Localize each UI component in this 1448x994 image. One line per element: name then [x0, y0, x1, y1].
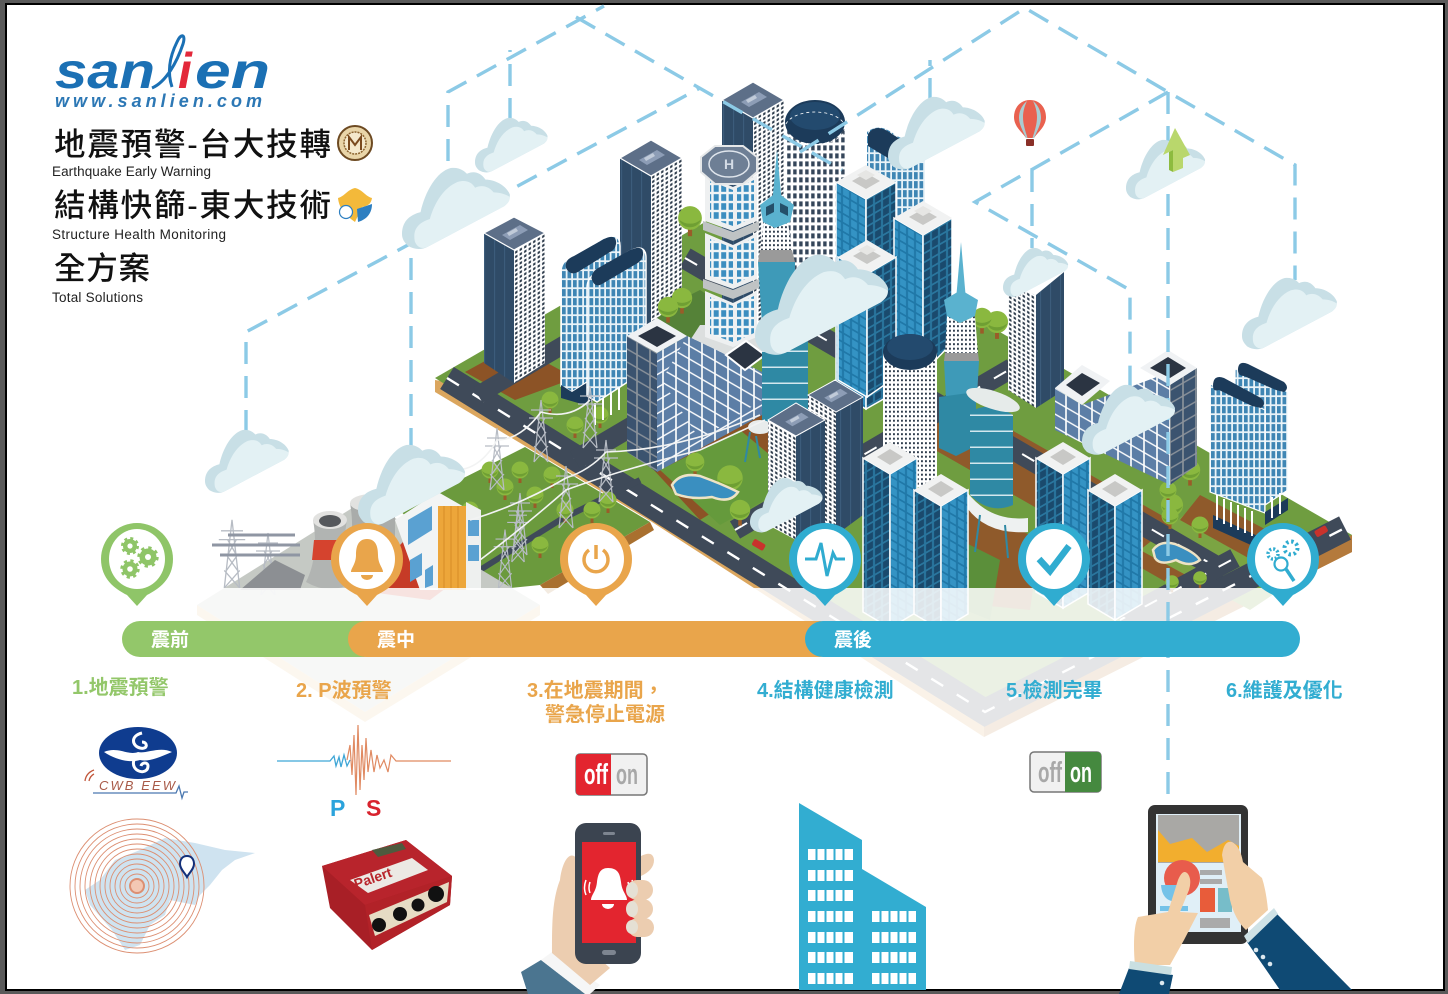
tower segment 1 — [703, 175, 759, 241]
isometric city illustration — [197, 82, 1352, 737]
right hand — [1222, 842, 1268, 930]
right sleeve — [1244, 908, 1352, 990]
switch: on active — [1030, 752, 1101, 792]
rounded tower behind cloud — [867, 128, 925, 260]
building icon — [799, 803, 926, 990]
tower T2 — [620, 140, 682, 328]
P and S labels: P — [330, 795, 345, 821]
green up arrow — [1163, 128, 1190, 172]
tower segment 2 — [703, 233, 759, 299]
phase: during: 震中 — [377, 629, 415, 651]
trees behind city — [658, 206, 1208, 538]
twin rounded towers left — [561, 236, 646, 425]
switch: on active: on — [1070, 757, 1092, 789]
power plant block — [197, 492, 540, 722]
green park block with trees — [462, 392, 640, 570]
switch: off active: off — [584, 759, 608, 791]
tower pair centre — [768, 380, 863, 540]
icon: NTU seal — [338, 126, 372, 160]
heading: structure health monitoring — [52, 187, 331, 242]
seismic waveform — [277, 725, 451, 795]
Palert device — [322, 840, 452, 950]
teal round tower — [762, 340, 808, 432]
step 3 label: 警急停止電源 — [545, 702, 665, 726]
office block right — [1055, 350, 1197, 485]
step 3 label: 3.在地震期間， — [527, 679, 664, 702]
blue tower C2 — [894, 201, 952, 373]
red cars — [751, 525, 1329, 551]
step 3 label — [527, 679, 665, 726]
office block left — [627, 318, 765, 472]
spire tower 2 — [939, 242, 979, 456]
phase: before — [122, 621, 382, 657]
P and S labels: S — [366, 795, 381, 821]
clouds — [205, 97, 1337, 532]
pond left — [672, 475, 738, 500]
sleeve — [521, 960, 585, 994]
heading: total solutions — [52, 250, 150, 305]
water tank — [745, 420, 773, 462]
blue tower C1 — [836, 165, 896, 409]
pin 6: gears and magnifier — [1247, 523, 1319, 606]
earthquake map with rings — [70, 819, 255, 953]
switch: off active — [576, 754, 647, 795]
step 1 label: 1.地震預警 — [72, 676, 169, 699]
blue tower C5 — [914, 474, 968, 630]
back tower T3 — [722, 82, 784, 340]
round tower — [785, 100, 845, 312]
CWB EEW logo — [85, 727, 188, 798]
pin 1: gears — [101, 523, 173, 606]
dashed network lines — [246, 6, 1295, 805]
phase: after — [805, 621, 1300, 657]
logo url: www.sanlien.com — [55, 91, 262, 111]
P and S labels — [330, 795, 381, 821]
phone in hand — [521, 823, 654, 994]
icon: Tokyo ginkgo — [338, 188, 372, 222]
cooling tower — [306, 511, 354, 589]
blue tower C6 — [1036, 442, 1090, 608]
heading: total solutions: Total Solutions — [52, 290, 143, 305]
pin 4: pulse — [789, 523, 861, 606]
helipad H: H — [724, 156, 734, 172]
tower T1 — [484, 217, 545, 383]
heading: structure health monitoring: Structure Health Monitoring — [52, 227, 226, 242]
step 6 label: 6.維護及優化 — [1226, 679, 1343, 702]
blue tower C3 — [838, 240, 896, 397]
heading: total solutions: 全方案 — [54, 250, 150, 286]
right twin towers — [1210, 363, 1288, 550]
switch: off active: on — [616, 759, 638, 791]
phase: before: 震前 — [151, 629, 189, 651]
city ground platform — [400, 192, 1352, 737]
spire tower 1 — [758, 150, 796, 325]
tablet with hands — [1119, 805, 1352, 994]
pylons and wires — [455, 386, 765, 560]
logo: i — [178, 43, 193, 99]
CWB EEW logo: CWB EEW — [99, 778, 177, 793]
heading: earthquake early warning — [52, 126, 331, 179]
map pin — [180, 856, 194, 877]
step 2 label: 2. P波預警 — [296, 679, 392, 702]
hot air balloon — [1014, 100, 1046, 146]
pond right — [1153, 543, 1200, 564]
step 4 label: 4.結構健康檢測 — [757, 678, 894, 702]
step 5 label: 5.檢測完畢 — [1006, 678, 1103, 702]
Palert device: Palert — [352, 864, 394, 892]
blue tower C4 — [863, 442, 917, 628]
phase: after: 震後 — [834, 629, 872, 651]
timeline bar — [122, 621, 1300, 657]
pin 5: check — [1018, 523, 1090, 606]
logo wordmark: san — [55, 43, 155, 99]
pin 3: power — [560, 523, 632, 606]
tower segment 3 — [705, 291, 757, 347]
heading: earthquake early warning: 地震預警-台大技轉 — [54, 126, 331, 162]
logo: en — [195, 43, 270, 99]
right trees — [1162, 508, 1207, 592]
fade overlay over lower illustration — [8, 588, 1442, 788]
round white tower 2 — [883, 334, 937, 487]
left sleeve — [1119, 961, 1173, 994]
left hand — [1134, 872, 1198, 965]
blue tower C7 — [1088, 474, 1142, 620]
tower with cloud — [1008, 272, 1064, 408]
pin 2: bell — [331, 523, 403, 606]
heading: structure health monitoring: 結構快篩-東大技術 — [54, 187, 331, 223]
hexagonal helipad tower — [687, 146, 770, 372]
heading: earthquake early warning: Earthquake Early Warning — [52, 164, 211, 179]
phase: during — [348, 621, 838, 657]
teal disc tower — [964, 383, 1028, 558]
switch: on active: off — [1038, 757, 1062, 789]
logo — [55, 36, 270, 111]
